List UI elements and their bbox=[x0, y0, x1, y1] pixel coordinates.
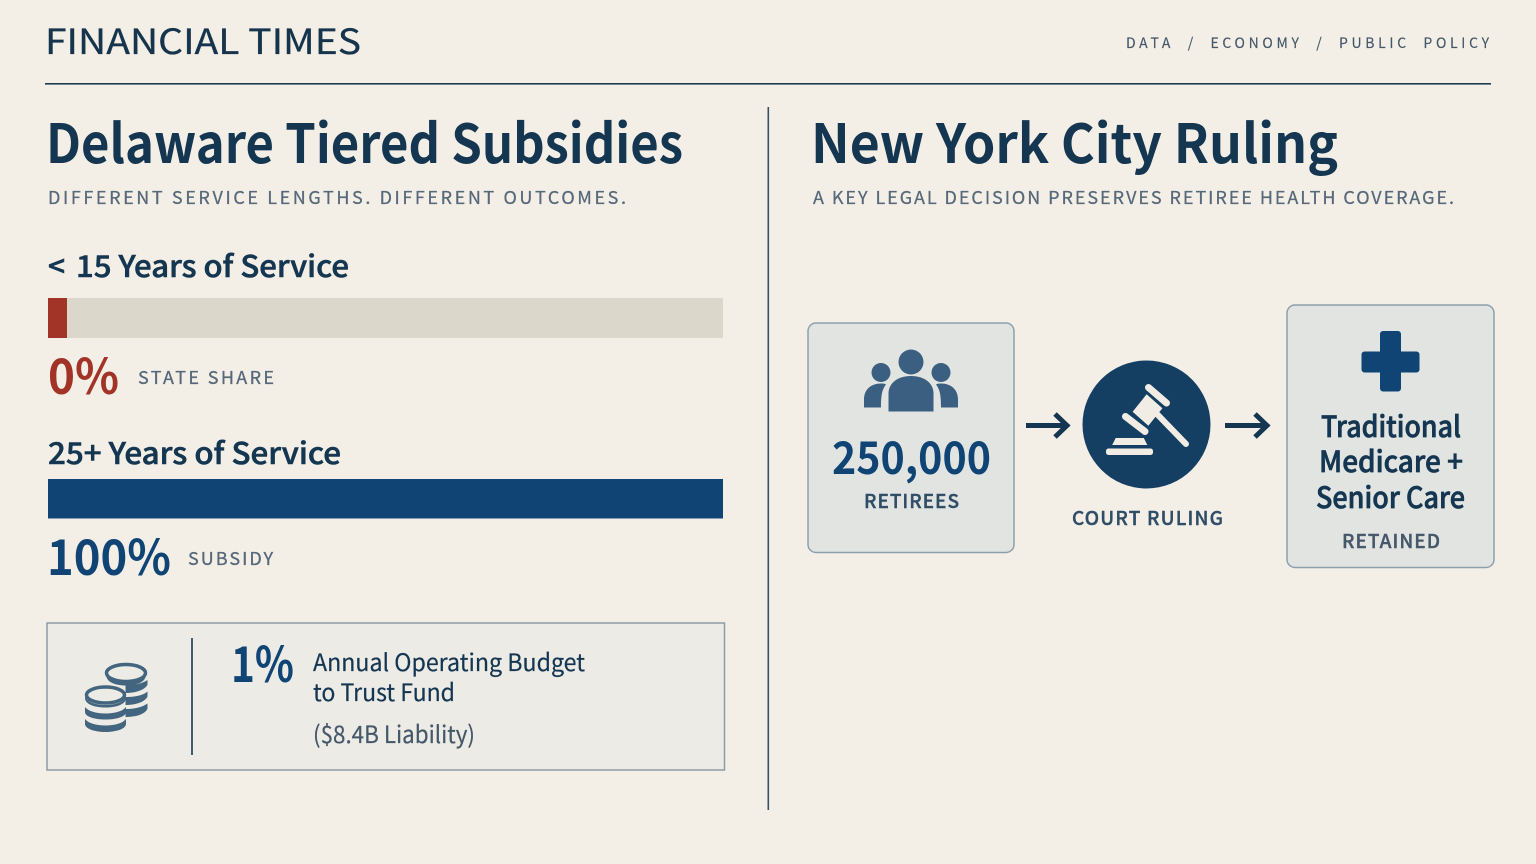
arrow: retirees to court bbox=[1026, 414, 1068, 437]
callout: trust fund: ($8.4B Liability) bbox=[313, 715, 475, 750]
court ruling bbox=[1072, 360, 1223, 531]
tier: under 15 years: 0% bbox=[48, 338, 119, 409]
callout text: Annual Operating Budget bbox=[313, 643, 585, 678]
1% stat: 1% bbox=[231, 626, 294, 697]
subheading: New York: A KEY LEGAL DECISION PRESERVES RETIREE HEALTH COVERAGE. bbox=[813, 184, 1454, 210]
icon: gavel bbox=[1106, 388, 1186, 455]
tier: 25+ years: 25+ Years of Service bbox=[48, 429, 341, 473]
masthead bbox=[45, 14, 1490, 65]
card: retained coverage: Medicare + bbox=[1319, 439, 1463, 481]
card: retirees: RETIREES bbox=[864, 487, 959, 514]
subheading: Delaware: DIFFERENT SERVICE LENGTHS. DIFFERENT OUTCOMES. bbox=[48, 184, 626, 210]
tier: under 15 years: STATE SHARE bbox=[138, 364, 274, 390]
icon: medical cross bbox=[1362, 331, 1420, 392]
card: retained coverage: RETAINED bbox=[1342, 527, 1440, 554]
tier: under 15 years: 15 Years of Service bbox=[76, 242, 349, 286]
tier: 25+ years bbox=[47, 429, 723, 590]
tier: under 15 years: < bbox=[48, 242, 65, 286]
tier: under 15 years bbox=[48, 242, 723, 409]
heading: New York: New York City Ruling bbox=[811, 100, 1338, 179]
panel: New York City ruling bbox=[808, 100, 1494, 568]
icon: people bbox=[864, 350, 958, 412]
tier: 25+ years: 100% bbox=[47, 519, 171, 590]
heading: Delaware: Delaware Tiered Subsidies bbox=[46, 100, 683, 179]
callout: trust fund: to Trust Fund bbox=[313, 673, 455, 708]
card: retained coverage bbox=[1287, 305, 1494, 568]
publication name: FINANCIAL TIMES bbox=[45, 14, 361, 65]
card text: Traditional bbox=[1321, 404, 1461, 446]
tier: 25+ years: SUBSIDY bbox=[188, 545, 273, 571]
card: retained coverage: Senior Care bbox=[1316, 475, 1465, 517]
card: retirees: 250,000 bbox=[832, 422, 991, 487]
court ruling: COURT RULING bbox=[1072, 504, 1223, 531]
callout: trust fund bbox=[47, 623, 724, 770]
arrow: court to retained bbox=[1225, 414, 1267, 437]
icon: coins bbox=[85, 664, 148, 732]
panel: Delaware tiered subsidies bbox=[46, 100, 724, 770]
card: retirees bbox=[808, 323, 1014, 552]
section tags: DATA / ECONOMY / PUBLIC POLICY bbox=[1126, 33, 1490, 53]
